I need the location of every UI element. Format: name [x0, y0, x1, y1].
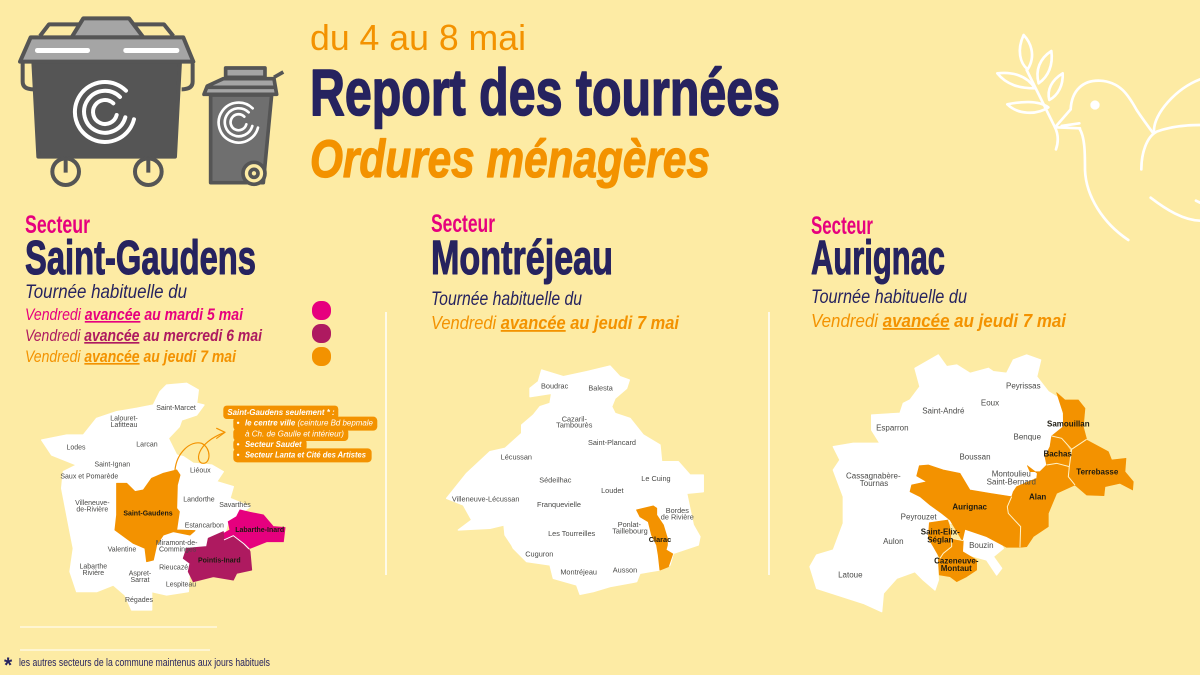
map: Saint-Gaudens sector: Saint-Gaudens [123, 511, 173, 518]
map: Saint-Gaudens sector: Liéoux [190, 468, 211, 475]
icon: small wheeled bin [204, 68, 283, 184]
map: Saint-Gaudens sector: Miramont-de- [156, 540, 198, 547]
map: Montréjeau sector: Lécussan [501, 452, 532, 461]
map: Montréjeau sector: Balesta [588, 383, 614, 392]
date line: du 4 au 8 mai [310, 17, 526, 58]
icon: large wheeled bin [20, 18, 193, 185]
map: Saint-Gaudens sector: Rieucazé [159, 565, 188, 572]
map: Montréjeau sector: Bordes [666, 506, 689, 515]
map: Montréjeau sector: Cuguron [525, 549, 553, 558]
panel: Saint-Gaudens heading and schedule [25, 211, 262, 366]
subtitle: Ordures ménagères [310, 130, 710, 189]
map: Montréjeau sector: Tambourès [556, 421, 593, 430]
map: Aurignac sector: Aurignac [952, 503, 988, 512]
map: Montréjeau sector: Boudrac [541, 382, 569, 391]
panel: Montréjeau heading and schedule: Vendredi avancée au jeudi 7 mai [431, 313, 680, 333]
map: Montréjeau sector: Les Tourreilles [548, 529, 596, 538]
map: Montréjeau sector: Le Cuing [641, 474, 671, 483]
panel: Saint-Gaudens heading and schedule: Vendredi avancée au mercredi 6 mai [25, 327, 262, 345]
map: Aurignac sector: Eoux [981, 398, 999, 407]
map: Aurignac sector: Saint-Elix- [921, 527, 960, 536]
map: Saint-Gaudens sector: Régades [125, 597, 153, 604]
panel: Aurignac heading and schedule: Tournée habituelle du [811, 287, 967, 308]
map: Saint-Gaudens sector: Pointis-Inard [198, 558, 241, 565]
callout: Saint-Gaudens seulement: Secteur Lanta et Cité des Artistes [245, 450, 366, 460]
map: Saint-Gaudens sector: Landorthe [183, 497, 215, 504]
map: Aurignac sector: Peyrissas [1006, 381, 1041, 390]
map: Aurignac sector: Boussan [959, 453, 991, 462]
map: Saint-Gaudens sector: Lafitteau [111, 422, 138, 429]
callout: Saint-Gaudens seulement: • [237, 439, 240, 449]
map: Saint-Gaudens sector: de-Rivière [76, 507, 108, 514]
map: Aurignac sector: Cassagnabère- [846, 471, 901, 480]
legend dots [312, 301, 331, 366]
map: Saint-Gaudens sector: Lespiteau [166, 581, 196, 588]
map: Saint-Gaudens sector: Valentine [108, 547, 136, 554]
panel: Saint-Gaudens heading and schedule: Saint-Gaudens [25, 232, 256, 285]
map: Montréjeau sector: Ponlat- [618, 520, 641, 529]
map: Saint-Gaudens sector: Saint-Marcet [156, 405, 196, 412]
map: Aurignac sector: Terrebasse [1076, 468, 1119, 477]
map: Montréjeau sector: Loudet [601, 486, 624, 495]
map: Montréjeau sector: Ausson [613, 565, 637, 574]
callout: Saint-Gaudens seulement: à Ch. de Gaulle et intérieur) [245, 429, 344, 439]
map: Montréjeau sector: Taillebourg [612, 526, 648, 535]
icon: dove with olive branch [997, 35, 1200, 240]
map: Aurignac sector: Peyrouzet [901, 512, 937, 521]
panel: Aurignac heading and schedule: Aurignac [811, 232, 945, 285]
map: Saint-Gaudens sector: Estancarbon [185, 523, 224, 530]
map: Aurignac sector: Séglan [927, 535, 954, 544]
map: Aurignac sector: Bachas [1043, 450, 1072, 459]
map: Saint-Gaudens sector: Savarthès [219, 502, 251, 509]
callout: Saint-Gaudens seulement: • [237, 450, 240, 460]
map: Aurignac sector: Latoue [838, 571, 863, 580]
map: Montréjeau sector: Franquevielle [537, 500, 581, 509]
panel: Montréjeau heading and schedule [431, 210, 680, 333]
map: Aurignac sector: Cazeneuve- [934, 556, 979, 565]
panel: Montréjeau heading and schedule: Tournée habituelle du [431, 289, 582, 310]
panel: Saint-Gaudens heading and schedule: Tournée habituelle du [25, 282, 187, 303]
callout: Saint-Gaudens seulement: Saint-Gaudens seulement * : [227, 407, 335, 417]
footnote: les autres secteurs de la commune maintenus aux jours habituels [19, 657, 270, 669]
callout: Saint-Gaudens seulement: le centre ville (ceinture Bd bepmale [245, 418, 373, 428]
map: Montréjeau sector [447, 366, 703, 594]
map: Aurignac sector: Alan [1029, 492, 1046, 501]
map: Saint-Gaudens sector: Aspret- [129, 570, 152, 577]
map: Aurignac sector: Tournas [860, 479, 888, 488]
panel: Saint-Gaudens heading and schedule: Vendredi avancée au mardi 5 mai [25, 306, 243, 324]
map: Montréjeau sector: Sédeilhac [539, 475, 572, 484]
map: Saint-Gaudens sector: Sarrat [130, 577, 150, 584]
panel: Montréjeau heading and schedule: Secteur [431, 210, 495, 238]
map: Aurignac sector: Esparron [876, 423, 909, 432]
map: Aurignac sector [810, 355, 1133, 612]
panel: Aurignac heading and schedule [811, 212, 1067, 331]
map: Montréjeau sector: Clarac [649, 535, 671, 544]
callout: Saint-Gaudens seulement: Secteur Saudet [245, 439, 303, 449]
map: Saint-Gaudens sector [42, 383, 285, 610]
map: Aurignac sector: Montaut [941, 564, 972, 573]
callout: Saint-Gaudens seulement [223, 406, 377, 462]
panel: Montréjeau heading and schedule: Montréjeau [431, 232, 613, 285]
map: Aurignac sector: Saint-Bernard [987, 477, 1036, 486]
panel: Saint-Gaudens heading and schedule: Vendredi avancée au jeudi 7 mai [25, 348, 236, 366]
map: Montréjeau sector: Villeneuve-Lécussan [452, 495, 519, 504]
arrow: curl from Saint-Gaudens to callout [175, 428, 225, 470]
map: Saint-Gaudens sector: Larcan [136, 442, 158, 449]
panel: Saint-Gaudens heading and schedule: Secteur [25, 211, 90, 239]
map: Aurignac sector: Samouillan [1047, 420, 1090, 429]
map: Aurignac sector: Montoulieu [992, 469, 1031, 478]
map: Saint-Gaudens sector: Labarthe [80, 563, 107, 570]
map: Saint-Gaudens sector: Lalouret- [110, 415, 138, 422]
map: Montréjeau sector: Cazaril- [562, 414, 587, 423]
callout: Saint-Gaudens seulement: • [237, 418, 240, 428]
map: Saint-Gaudens sector: Villeneuve- [75, 500, 110, 507]
map: Montréjeau sector: de Rivière [661, 512, 694, 521]
map: Saint-Gaudens sector: Saint-Ignan [94, 462, 130, 469]
map: Saint-Gaudens sector: Labarthe-Inard [235, 527, 284, 534]
map: Montréjeau sector: Montréjeau [560, 568, 597, 577]
map: Aurignac sector: Saint-André [922, 407, 965, 416]
title: Report des tournées [310, 55, 780, 129]
map: Saint-Gaudens sector: Rivière [82, 570, 104, 577]
map: Aurignac sector: Bouzin [969, 541, 994, 550]
map: Aurignac sector: Aulon [883, 537, 904, 546]
panel: Aurignac heading and schedule: Secteur [811, 212, 873, 240]
footnote [4, 654, 270, 675]
map: Saint-Gaudens sector: Lodes [66, 445, 86, 452]
panel: Aurignac heading and schedule: Vendredi avancée au jeudi 7 mai [811, 311, 1067, 331]
map: Aurignac sector: Benque [1014, 432, 1042, 441]
map: Montréjeau sector: Saint-Plancard [588, 438, 636, 447]
map: Saint-Gaudens sector: Comminges [159, 547, 197, 554]
map: Saint-Gaudens sector: Saux et Pomarède [60, 473, 118, 480]
